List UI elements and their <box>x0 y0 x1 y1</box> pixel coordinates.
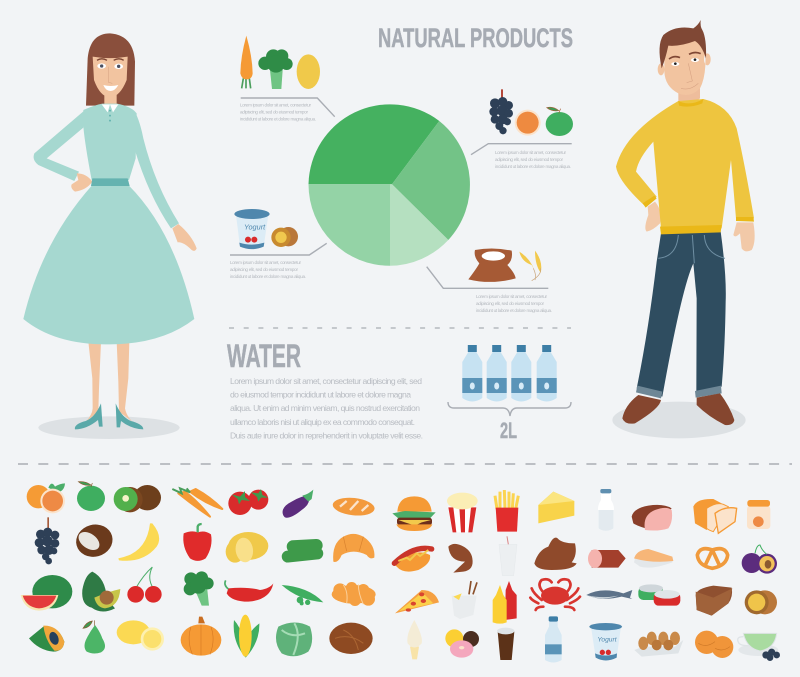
icon: wheat <box>519 251 541 281</box>
icon: donuts <box>445 629 479 658</box>
icon: burger <box>392 496 436 531</box>
water body text: aliqua. Ut enim ad minim veniam, quis nostrud exercitation <box>230 403 420 413</box>
top icons, drawn in zoomed coordinates <box>234 36 573 282</box>
icon: green tea and berries <box>738 633 780 661</box>
icon: fish <box>586 590 632 599</box>
icon: broccoli <box>184 571 214 606</box>
icon: grapes <box>35 517 59 564</box>
icon: potato <box>226 532 268 563</box>
man sweater <box>616 99 754 228</box>
man figure <box>612 20 755 438</box>
icon: eggplant <box>283 490 313 518</box>
icon: water bottle <box>545 616 562 662</box>
icon: carrot <box>240 36 253 88</box>
caption: grains: adipiscing elit, sed do eiusmod tempor <box>476 301 544 306</box>
icon: chicken wings <box>448 544 473 573</box>
icon: pumpkin <box>181 617 221 656</box>
icon: brown loaf <box>696 586 732 616</box>
leader line: vegetables <box>241 98 335 117</box>
icon: fries <box>495 490 518 532</box>
woman shadow <box>38 416 180 439</box>
man hair <box>660 20 706 68</box>
icon: four water bottles <box>462 345 557 402</box>
water body text: Lorem ipsum dolor sit amet, consectetur adipiscing elit, sed <box>230 376 422 386</box>
icon: braided bread <box>332 582 376 606</box>
icon: sauce bottles <box>493 581 517 624</box>
icon: chili pepper <box>225 580 273 602</box>
icon: ham <box>632 505 672 531</box>
icon: apple <box>77 482 105 511</box>
icon: coffee cup <box>497 628 514 660</box>
icon: plums <box>742 545 777 574</box>
jeans pockets <box>658 235 725 263</box>
food section divider <box>18 463 792 465</box>
man facial features <box>669 52 701 89</box>
woman shoes <box>75 403 143 429</box>
icon: baguette <box>332 496 375 517</box>
icon: sliced bread <box>693 499 737 533</box>
food grid: right half <box>392 489 780 662</box>
water body text: ullamco laboris nisi ut aliquip ex ea commodo consequat. <box>230 417 415 427</box>
icon: jam jar <box>747 500 770 529</box>
food grid: left half <box>21 482 376 658</box>
icon: grapes <box>489 89 513 134</box>
caption: vegetables: Lorem ipsum dolor sit amet, consectetur <box>240 102 311 108</box>
woman legs <box>85 342 133 422</box>
jeans cuffs <box>636 386 722 398</box>
woman hair <box>86 33 135 106</box>
label: 2L: 2L <box>500 418 517 443</box>
woman belt <box>91 178 130 186</box>
icon: cookies <box>695 631 733 658</box>
caption: grains: Lorem ipsum dolor sit amet, consectetur <box>476 294 547 299</box>
icon: noodle box <box>452 581 477 619</box>
caption: dairy and nuts: incididunt ut labore et dolore magna aliqua. <box>230 274 306 279</box>
icon: round loaf <box>329 623 373 654</box>
caption: dairy and nuts: adipiscing elit, sed do eiusmod tempor <box>230 267 298 272</box>
icon: flour sack <box>468 248 516 282</box>
caption: fruit: incididunt ut labore et dolore magna aliqua. <box>495 164 571 169</box>
caption: fruit: adipiscing elit, sed do eiusmod tempor <box>495 157 563 162</box>
icon: croissant <box>333 534 374 562</box>
bottle 1 <box>462 345 482 402</box>
slice: dairy and nuts <box>308 184 390 266</box>
slice: grains <box>390 184 448 266</box>
icon: corn <box>234 615 259 658</box>
icon: walnut <box>271 227 298 247</box>
woman facial features <box>97 59 124 91</box>
woman neck and face <box>93 57 128 107</box>
woman buttons <box>109 110 111 122</box>
icon: egg carton <box>634 632 683 657</box>
bottle 3 <box>511 345 531 402</box>
icon: cucumbers <box>281 539 324 563</box>
icon: pear <box>83 620 105 654</box>
woman skirt <box>23 185 194 344</box>
water body text: do eiusmod tempor incididunt ut labore et dolore magna <box>230 390 411 400</box>
caption: grains: incididunt ut labore et dolore magna aliqua. <box>476 308 552 313</box>
icon: cabbage <box>276 622 312 656</box>
sweater trims <box>643 99 754 234</box>
icon: green apple <box>546 107 573 136</box>
icon: tin cans <box>638 584 680 606</box>
icon: pizza slice <box>395 590 439 613</box>
woman hands <box>71 173 197 251</box>
icon: coconut <box>72 520 116 561</box>
icon: orange slice <box>515 110 541 136</box>
man shoes <box>622 393 734 425</box>
icon: papaya <box>29 626 64 652</box>
bottle 4 <box>537 345 557 402</box>
icon: avocado <box>82 572 120 612</box>
man hands <box>645 202 755 251</box>
icon: carrots <box>172 488 222 517</box>
title: NATURAL PRODUCTS <box>378 23 573 53</box>
woman collar <box>102 104 118 112</box>
icon: yogurt cup: Yogurt <box>244 222 266 231</box>
icon: roast turkey <box>534 538 577 570</box>
caption: dairy and nuts: Lorem ipsum dolor sit amet, consectetur <box>230 260 301 265</box>
icon: cheese <box>538 492 574 523</box>
icon: kiwi <box>114 485 161 512</box>
section divider <box>229 327 571 329</box>
caption: vegetables: incididunt ut labore et dolore magna aliqua. <box>240 116 316 122</box>
icon: crab <box>530 579 580 610</box>
icon: watermelon <box>21 575 72 611</box>
leader line: grains <box>427 267 548 288</box>
icon: milk bottle <box>598 489 614 531</box>
man neck <box>678 87 700 104</box>
icon: broccoli <box>258 49 293 89</box>
woman left arm <box>34 110 85 181</box>
heading: water: WATER <box>227 338 301 374</box>
caption: fruit: Lorem ipsum dolor sit amet, consectetur <box>495 150 566 155</box>
icon: yogurt cup <box>234 209 270 249</box>
pie chart <box>308 104 470 266</box>
icon: tomatoes <box>228 489 268 515</box>
icon: oranges <box>27 483 65 513</box>
man jeans <box>637 232 726 397</box>
icon: cherries <box>127 567 162 603</box>
bottle 2 <box>487 345 507 402</box>
icon: banana <box>118 523 159 561</box>
icon: peas <box>282 585 323 605</box>
leader line: dairy and nuts <box>230 243 327 255</box>
water body text: Duis aute irure dolor in reprehenderit in voluptate velit esse. <box>230 430 423 440</box>
icon: popcorn <box>447 493 478 532</box>
woman right arm <box>134 113 179 228</box>
slice: fruit <box>392 121 470 240</box>
icon: salmon <box>634 549 673 568</box>
icon: potato <box>297 54 320 89</box>
caption: vegetables: adipiscing elit, sed do eiusmod tempor <box>240 110 308 114</box>
man head <box>658 32 711 95</box>
woman figure <box>23 33 197 439</box>
man shadow <box>612 402 746 438</box>
icon: hot dog <box>394 548 432 572</box>
icon: yogurt cup <box>589 623 622 660</box>
icon: soft drink <box>499 536 517 576</box>
icon: sausage <box>588 549 626 568</box>
icon: lemons <box>117 620 164 651</box>
icon: walnut <box>745 590 777 614</box>
icon: bell pepper <box>183 524 212 561</box>
brace under bottles <box>448 402 571 416</box>
icon: pretzel <box>697 549 728 568</box>
slice: vegetables <box>308 104 439 184</box>
leader line: fruit <box>471 144 572 155</box>
icon: ice cream <box>407 620 422 659</box>
icon: yogurt cup: Yogurt <box>597 637 618 644</box>
woman bodice <box>83 104 137 180</box>
